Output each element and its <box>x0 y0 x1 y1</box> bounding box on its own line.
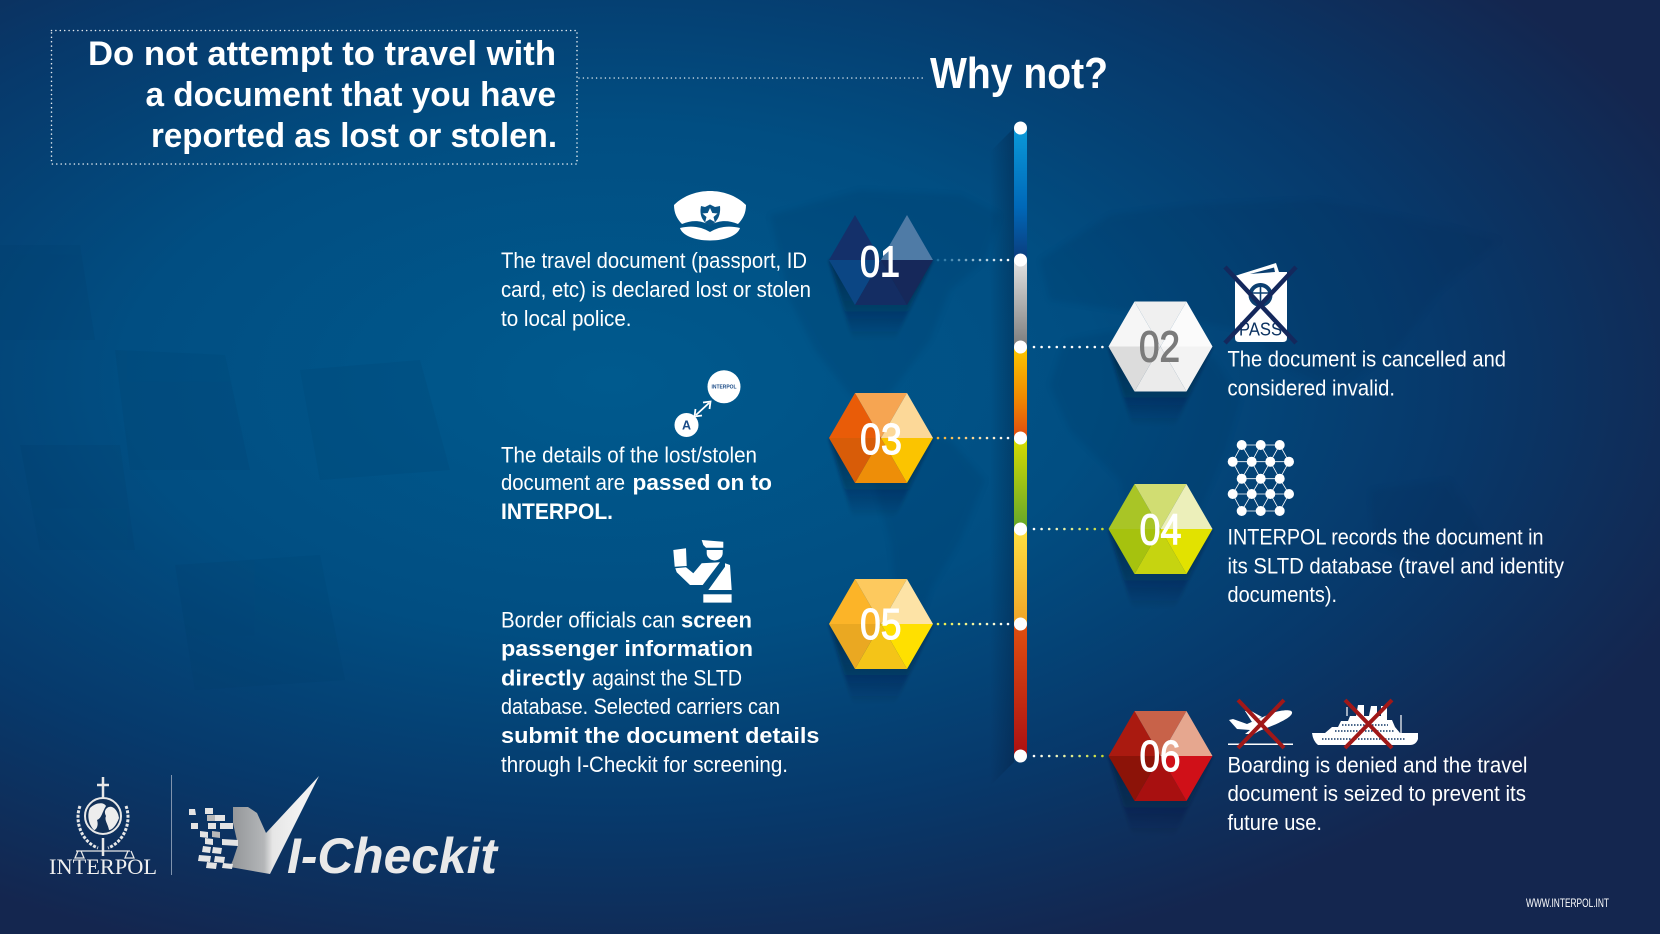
checker backdrop squares <box>0 245 450 690</box>
dotted link from title to heading <box>579 77 923 79</box>
title box: a document that you have <box>146 76 556 114</box>
hexagon 02: 02 <box>1139 322 1180 372</box>
icon: cancelled passport: PASS <box>1239 320 1282 340</box>
connector 06 <box>1034 755 1103 757</box>
hexagon 05 <box>829 579 933 704</box>
text: step 04: documents). <box>1228 582 1337 607</box>
text: step 01: to local police. <box>501 306 632 331</box>
hexagon 01: 01 <box>860 238 900 286</box>
text: step 03: passed on to <box>632 470 772 495</box>
connector 03 <box>938 437 1009 439</box>
title box: Do not attempt to travel with <box>88 35 556 73</box>
INTERPOL logo <box>49 777 157 879</box>
hexagon 04: 04 <box>1140 506 1182 554</box>
hexagon 01 <box>829 215 933 340</box>
text: step 05 <box>501 608 820 777</box>
website URL: WWW.INTERPOL.INT <box>1526 896 1609 910</box>
text: step 05: through I-Checkit for screening. <box>501 752 788 777</box>
icon: police cap <box>674 191 746 240</box>
text: step 03: document are <box>501 470 625 495</box>
icon: border official <box>673 540 732 603</box>
hexagon 06 <box>1108 711 1212 836</box>
INTERPOL logo: INTERPOL <box>49 854 157 879</box>
icon: cancelled passport <box>1225 263 1296 343</box>
text: step 06: Boarding is denied and the travel <box>1228 753 1528 778</box>
title box <box>52 30 577 164</box>
text: step 01: The travel document (passport, ID <box>501 248 807 273</box>
I-Checkit logo <box>189 776 499 884</box>
text: step 03: The details of the lost/stolen <box>501 443 757 468</box>
logo divider <box>170 775 172 875</box>
heading: Why not?: Why not? <box>930 49 1108 98</box>
world map backdrop <box>770 190 1500 640</box>
text: step 02 <box>1228 347 1506 401</box>
text: step 05: against the SLTD <box>592 666 742 690</box>
text: step 04: INTERPOL records the document in <box>1228 525 1544 550</box>
hexagon 05: 05 <box>860 600 902 649</box>
hexagon 04 <box>1108 484 1212 609</box>
icon: INTERPOL link: INTERPOL <box>712 384 737 390</box>
text: step 02: considered invalid. <box>1228 376 1395 401</box>
text: step 03: INTERPOL. <box>501 499 613 524</box>
icon: INTERPOL link: A <box>682 418 691 432</box>
hexagon 06: 06 <box>1140 732 1180 781</box>
icon: ship crossed out <box>1312 700 1418 748</box>
connector 05 <box>938 623 1009 625</box>
icon: plane crossed out <box>1228 700 1293 748</box>
text: step 03 <box>501 443 772 524</box>
text: step 05: Border officials can <box>501 608 675 633</box>
text: step 06: document is seized to prevent its <box>1228 781 1526 806</box>
hexagon 02 <box>1108 302 1212 426</box>
connector 01 <box>938 259 1009 261</box>
text: step 01 <box>501 248 811 331</box>
text: step 06 <box>1228 753 1528 835</box>
text: step 05: database. Selected carriers can <box>501 694 780 719</box>
text: step 05: screen <box>681 608 752 633</box>
icon: INTERPOL link <box>674 370 740 437</box>
text: step 05: passenger information <box>501 636 753 661</box>
connector 02 <box>1034 346 1103 348</box>
icon: network database <box>1228 440 1294 516</box>
text: step 04 <box>1228 525 1565 607</box>
text: step 05: directly <box>501 666 585 690</box>
hexagon 03 <box>829 393 933 518</box>
timeline bar <box>990 122 1027 786</box>
text: step 02: The document is cancelled and <box>1228 347 1506 372</box>
text: step 04: its SLTD database (travel and identity <box>1228 554 1565 579</box>
hexagon 03: 03 <box>860 415 902 464</box>
connector 04 <box>1034 528 1103 530</box>
text: step 01: card, etc) is declared lost or stolen <box>501 277 811 302</box>
text: step 06: future use. <box>1228 810 1322 835</box>
text: step 05: submit the document details <box>501 723 820 748</box>
I-Checkit logo: I-Checkit <box>287 828 499 884</box>
title box: reported as lost or stolen. <box>151 117 557 155</box>
